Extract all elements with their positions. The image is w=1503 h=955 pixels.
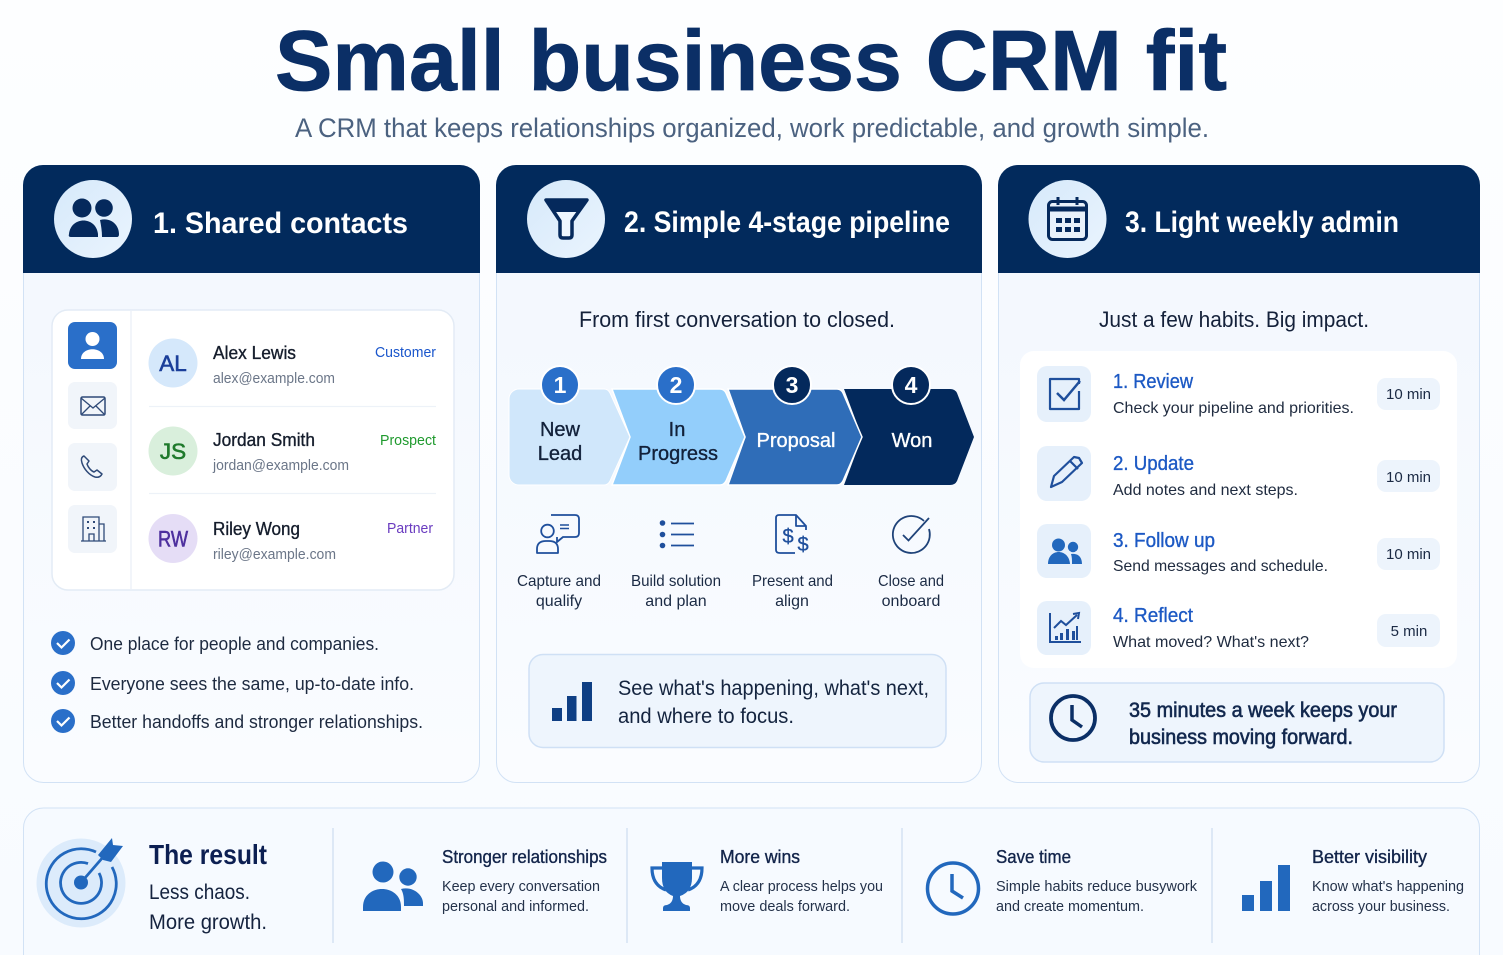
stage 4: Won (844, 389, 974, 485)
subheading: Just a few habits. Big impact. (1099, 307, 1369, 332)
habit: update: 10 min (1386, 469, 1431, 486)
callout text: See what's happening, what's next, (618, 676, 929, 700)
habit: follow up: 3. Follow up (1113, 530, 1215, 552)
stage 1 detail (517, 515, 601, 610)
title: Small business CRM fit (275, 14, 1227, 109)
callout text: business moving forward. (1129, 726, 1353, 749)
contact row: Jordan Smith: JS (160, 439, 186, 464)
panel header (23, 165, 480, 273)
step badge 3: 3 (786, 372, 798, 398)
contact row: Riley Wong: RW (158, 526, 189, 552)
panel: shared contacts (23, 165, 480, 782)
habit: reflect: 4. Reflect (1113, 605, 1193, 627)
stage 2: In Progress: In (669, 419, 685, 441)
icon: clock (928, 863, 978, 914)
stage 3 detail: align (775, 593, 809, 610)
contact row: Alex Lewis: alex@example.com (213, 371, 335, 387)
callout: focus (529, 654, 946, 748)
panel header (998, 165, 1480, 273)
heading: 2. Simple 4-stage pipeline (624, 206, 950, 239)
stage 4: Won: Won (892, 430, 932, 452)
habit: reflect: 5 min (1391, 623, 1427, 640)
panel header (496, 165, 982, 273)
stage 2 detail: Build solution (631, 573, 721, 590)
stage 3 detail: $ (797, 534, 809, 556)
result: save time: and create momentum. (996, 898, 1144, 915)
step badge 2: 2 (670, 372, 682, 398)
contact row: Riley Wong: Partner (387, 521, 433, 537)
result: more wins: A clear process helps you (720, 878, 883, 895)
stage 1: New Lead (509, 389, 630, 485)
heading: 3. Light weekly admin (1125, 206, 1399, 239)
stage 1 detail: Capture and (517, 573, 601, 590)
callout text: 35 minutes a week keeps your (1129, 699, 1397, 722)
contact row: Jordan Smith: Prospect (380, 433, 436, 449)
stage 2: In Progress (612, 389, 745, 485)
icon: phone tab (68, 443, 117, 491)
icon: calendar (1028, 180, 1106, 258)
stage 1: New Lead: Lead (538, 443, 582, 465)
step badge 1: 1 (554, 372, 567, 398)
contact row: Alex Lewis: Alex Lewis (213, 343, 296, 363)
result: stronger relationships (363, 847, 607, 915)
habits list (1020, 351, 1457, 668)
stage 2: In Progress: Progress (638, 443, 718, 465)
icon: target and arrow (36, 838, 126, 928)
stage 2 detail: and plan (645, 593, 707, 610)
habit: reflect: What moved? What's next? (1113, 634, 1309, 651)
stage 1 detail: qualify (536, 593, 582, 610)
stage 4 detail (878, 516, 944, 610)
stage 3: Proposal: Proposal (757, 430, 835, 452)
result: stronger relationships: personal and informed. (442, 898, 589, 915)
subheading: From first conversation to closed. (579, 307, 895, 332)
habit: review (1037, 366, 1440, 422)
heading: 1. Shared contacts (153, 207, 408, 240)
stage 4 detail: onboard (882, 593, 940, 610)
contact row: Jordan Smith: Jordan Smith (213, 430, 315, 450)
icon: envelope tab (68, 382, 117, 429)
result text (149, 881, 267, 934)
result: better visibility: Better visibility (1312, 847, 1427, 867)
result: stronger relationships: Keep every conversation (442, 878, 600, 895)
callout text (1129, 699, 1397, 749)
result: more wins: More wins (720, 847, 800, 867)
subtitle: A CRM that keeps relationships organized, work predictable, and growth simple. (295, 113, 1209, 143)
habit: update (1037, 446, 1440, 501)
habit: update: 2. Update (1113, 453, 1194, 475)
icon: people (54, 180, 132, 258)
habit: follow up: Send messages and schedule. (1113, 558, 1328, 575)
result: better visibility (1242, 847, 1464, 915)
stage 2 detail (631, 520, 721, 610)
contact row: Alex Lewis: AL (159, 351, 187, 376)
result: better visibility: Know what's happening (1312, 878, 1464, 895)
panel: pipeline (496, 165, 982, 782)
step badge 1 (541, 366, 579, 404)
result: save time: Save time (996, 847, 1071, 867)
contact card (52, 310, 454, 590)
contact row: Riley Wong: Riley Wong (213, 519, 300, 539)
contact row: Jordan Smith: jordan@example.com (212, 458, 349, 474)
icon: building tab (68, 505, 117, 553)
icon: people (363, 862, 423, 911)
result: save time (928, 847, 1197, 915)
result: stronger relationships: Stronger relationships (442, 847, 607, 867)
icon: bars (552, 682, 592, 721)
step badge 2 (657, 366, 695, 404)
result: save time: Simple habits reduce busywork (996, 878, 1197, 895)
icon: contact tab active (68, 322, 117, 369)
habit: follow up: 10 min (1386, 546, 1431, 563)
stage 4 detail: Close and (878, 573, 944, 590)
contact row: Alex Lewis (148, 338, 436, 388)
stage 1: New Lead: New (540, 419, 581, 441)
habit: review: 10 min (1386, 386, 1431, 403)
habit: review: 1. Review (1113, 371, 1194, 393)
step badge 4 (892, 366, 930, 404)
icon: funnel (527, 180, 605, 258)
result text: More growth. (149, 911, 267, 934)
habit: review: Check your pipeline and priorities. (1113, 400, 1354, 417)
stage 3 detail (752, 515, 833, 610)
icon: clock (1051, 696, 1095, 740)
habit: update: Add notes and next steps. (1113, 482, 1298, 499)
habit: follow up (1037, 524, 1440, 578)
contact row: Alex Lewis: Customer (375, 345, 436, 361)
result text: Less chaos. (149, 881, 250, 904)
contact row: Riley Wong (148, 514, 433, 563)
callout: 35 minutes (1030, 683, 1444, 762)
icon: bars (1242, 865, 1290, 911)
result heading: The result (149, 839, 267, 870)
callout text (618, 676, 929, 728)
step badge 3 (773, 366, 811, 404)
stage 3 detail: Present and (752, 573, 833, 590)
benefit: same info: Everyone sees the same, up-to-date info. (90, 674, 414, 694)
benefit: one place: One place for people and companies. (90, 634, 379, 654)
contact row: Riley Wong: riley@example.com (213, 547, 336, 563)
result: more wins: move deals forward. (720, 898, 850, 915)
result: more wins (652, 847, 883, 915)
icon: trophy (652, 862, 702, 911)
callout text: and where to focus. (618, 704, 794, 728)
step badge 4: 4 (905, 372, 918, 398)
panel: weekly admin (998, 165, 1480, 782)
benefit: better handoffs: Better handoffs and stronger relationships. (90, 712, 423, 732)
stage 3: Proposal (728, 389, 862, 485)
panel: the result (24, 808, 1480, 955)
stage 3 detail: $ (782, 526, 794, 548)
habit: reflect (1037, 601, 1440, 655)
result: better visibility: across your business. (1312, 898, 1450, 915)
contact row: Jordan Smith (148, 426, 436, 476)
